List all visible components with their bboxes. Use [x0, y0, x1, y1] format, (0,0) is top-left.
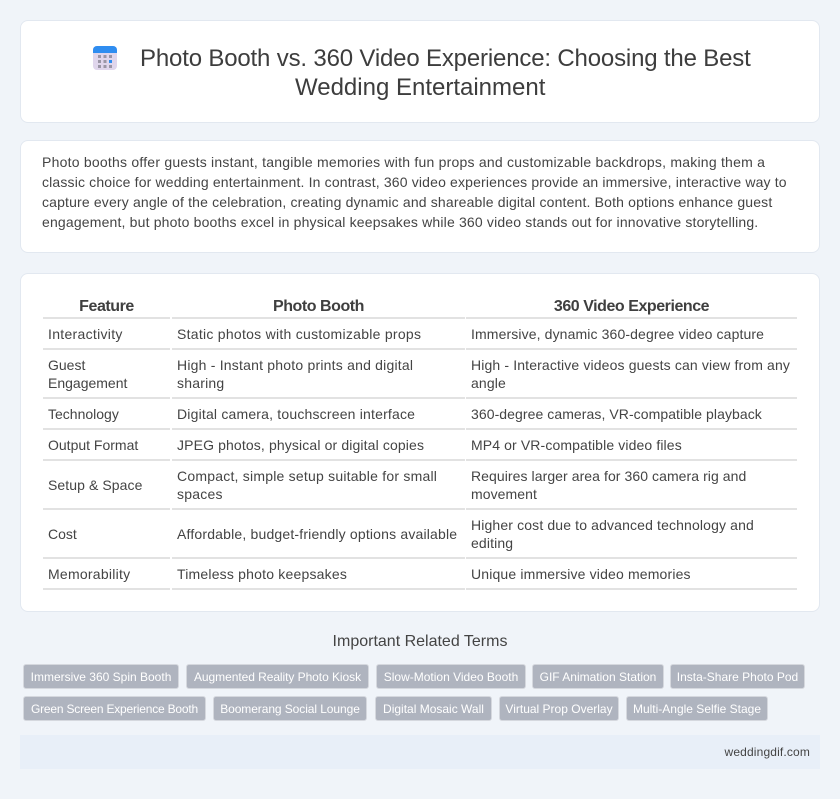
row: guest engagement — [48, 357, 128, 391]
row: memorability: Memorability — [48, 566, 130, 582]
header: photo booth: Photo Booth — [273, 298, 364, 315]
related terms tags: Boomerang Social Lounge — [220, 702, 360, 716]
related terms tags: Virtual Prop Overlay — [505, 702, 613, 716]
row: interactivity: Interactivity — [48, 326, 123, 342]
panel: comparison table: JPEG photos, physical or digital copies — [177, 437, 424, 453]
intro text: Photo booths offer guests instant, tangible memories with fun props and customizable backdrops, making them a — [42, 154, 765, 170]
panel: comparison table: spaces — [177, 486, 223, 502]
related terms tags — [23, 664, 805, 721]
related terms tags: GIF Animation Station — [540, 670, 656, 684]
related terms heading: Important Related Terms — [333, 633, 507, 650]
panel: comparison table: angle — [471, 375, 506, 391]
related terms tags: Immersive 360 Spin Booth — [31, 670, 171, 684]
row: technology: Technology — [48, 406, 119, 422]
header: 360 video: 360 Video Experience — [554, 298, 709, 315]
panel: comparison table: Static photos with customizable props — [177, 326, 421, 342]
row: cost: Cost — [48, 526, 77, 542]
row: output format: Output Format — [48, 437, 138, 453]
panel: comparison table: Compact, simple setup suitable for small — [177, 468, 437, 484]
row: guest engagement: Guest — [48, 357, 85, 373]
panel: comparison table: Timeless photo keepsakes — [177, 566, 347, 582]
panel: comparison table: MP4 or VR-compatible video files — [471, 437, 682, 453]
title — [140, 45, 751, 101]
title: Photo Booth vs. 360 Video Experience: Choosing the Best — [140, 45, 751, 72]
related terms tags: Insta-Share Photo Pod — [677, 670, 798, 684]
intro text — [42, 154, 787, 230]
footer — [20, 735, 820, 769]
panel: comparison table: editing — [471, 535, 513, 551]
panel: comparison table — [20, 273, 820, 612]
related terms tags: Slow-Motion Video Booth — [384, 670, 518, 684]
panel: comparison table: Unique immersive video memories — [471, 566, 691, 582]
panel: comparison table: Digital camera, touchscreen interface — [177, 406, 415, 422]
panel: header — [20, 20, 820, 123]
panel: comparison table: 360-degree cameras, VR-compatible playback — [471, 406, 762, 422]
panel: comparison table: sharing — [177, 375, 224, 391]
panel: comparison table: High - Instant photo prints and digital — [177, 357, 413, 373]
header: feature: Feature — [79, 298, 134, 315]
intro text: engagement, but photo booths excel in physical keepsakes while 360 video stands out for innovative storytelling. — [42, 214, 758, 230]
panel: comparison table: movement — [471, 486, 537, 502]
icon: calendar — [93, 46, 117, 70]
panel: comparison table: Higher cost due to advanced technology and — [471, 517, 754, 533]
intro text: capture every angle of the celebration, creating dynamic and shareable digital content. Both options enhance guest — [42, 194, 772, 210]
related terms tags: Green Screen Experience Booth — [31, 702, 198, 716]
panel: comparison table: High - Interactive videos guests can view from any — [471, 357, 790, 373]
footer source: weddingdif.com — [725, 745, 810, 759]
panel: comparison table: Requires larger area for 360 camera rig and — [471, 468, 746, 484]
related terms tags: Digital Mosaic Wall — [383, 702, 484, 716]
row: guest engagement: Engagement — [48, 375, 127, 391]
panel: comparison table: Immersive, dynamic 360-degree video capture — [471, 326, 764, 342]
related terms tags: Multi-Angle Selfie Stage — [633, 702, 761, 716]
panel: comparison table: Affordable, budget-friendly options available — [177, 526, 457, 542]
panel: introduction — [20, 140, 820, 253]
row: setup and space: Setup & Space — [48, 477, 142, 493]
intro text: classic choice for wedding entertainment. In contrast, 360 video experiences provide an immersive, interactive way to — [42, 174, 787, 190]
title: Wedding Entertainment — [295, 74, 545, 101]
related terms tags: Augmented Reality Photo Kiosk — [194, 670, 361, 684]
